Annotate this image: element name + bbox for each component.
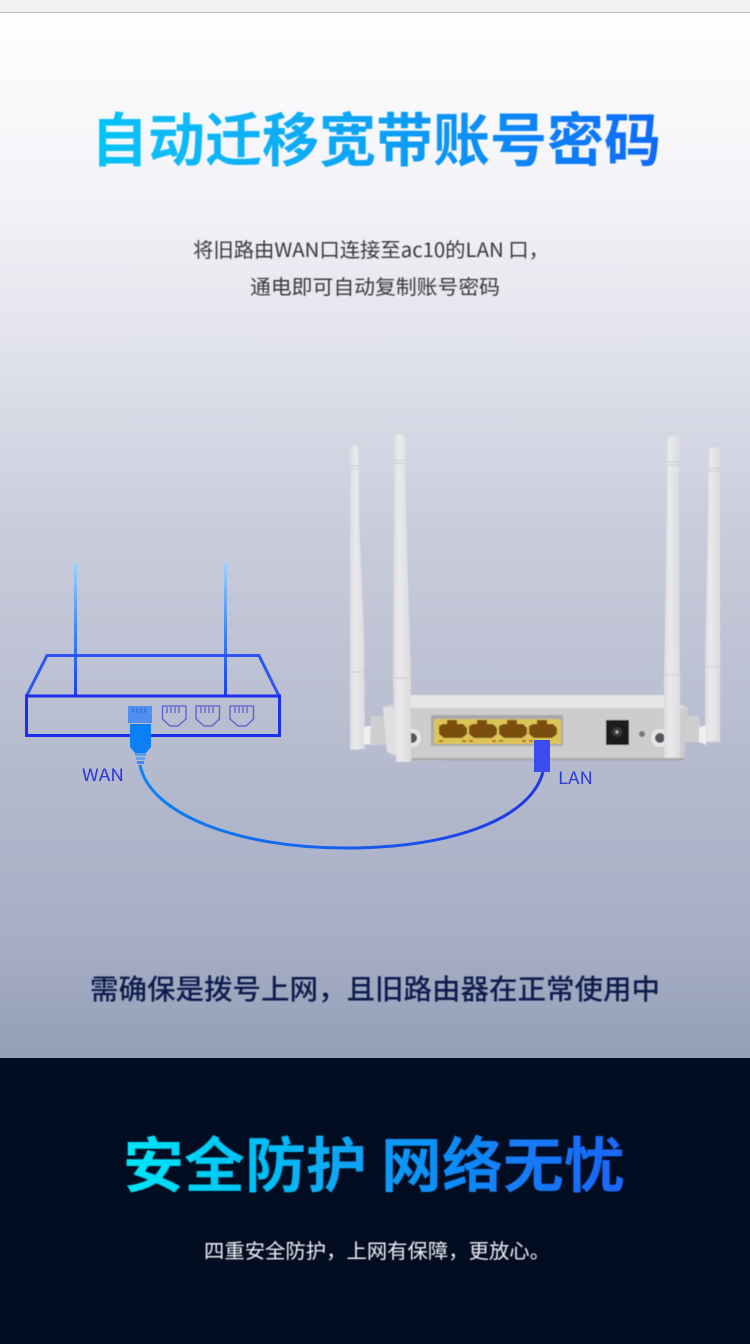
intro text: 通电即可自动复制账号密码: [250, 271, 500, 300]
label: WAN: WAN: [82, 761, 124, 786]
icon: old router line drawing: [26, 562, 280, 764]
label: LAN: LAN: [558, 764, 593, 789]
security subtext: 四重安全防护，上网有保障，更放心。: [204, 1235, 550, 1264]
side mounts: [364, 725, 374, 745]
icon: new white router: [350, 434, 720, 762]
antenna bases: [403, 729, 421, 747]
blue LAN connector block: [534, 740, 550, 772]
antenna bands: [350, 460, 720, 678]
port panel: [431, 715, 563, 746]
power socket: [606, 720, 629, 745]
port indicator lights: [439, 740, 533, 742]
intro text: 将旧路由WAN口连接至ac10的LAN 口，: [193, 234, 549, 263]
WAN port and plug: [128, 706, 152, 764]
note text: 需确保是拨号上网，且旧路由器在正常使用中: [90, 968, 660, 1008]
yellow LAN ports: [439, 720, 557, 738]
back antennas: [350, 445, 720, 750]
title: 自动迁移宽带账号密码: [91, 94, 661, 178]
old router LAN ports: [162, 706, 254, 726]
old router body: [26, 656, 280, 736]
cable connecting WAN to LAN: [140, 765, 543, 848]
panel: light upper background: [0, 0, 750, 1058]
intro text: [193, 234, 549, 300]
front antennas: [393, 434, 411, 762]
old router antennas: [76, 562, 226, 696]
heading: security: 安全防护 网络无忧: [123, 1118, 625, 1205]
panel: dark lower section: [0, 1058, 750, 1344]
router body: [383, 695, 688, 761]
